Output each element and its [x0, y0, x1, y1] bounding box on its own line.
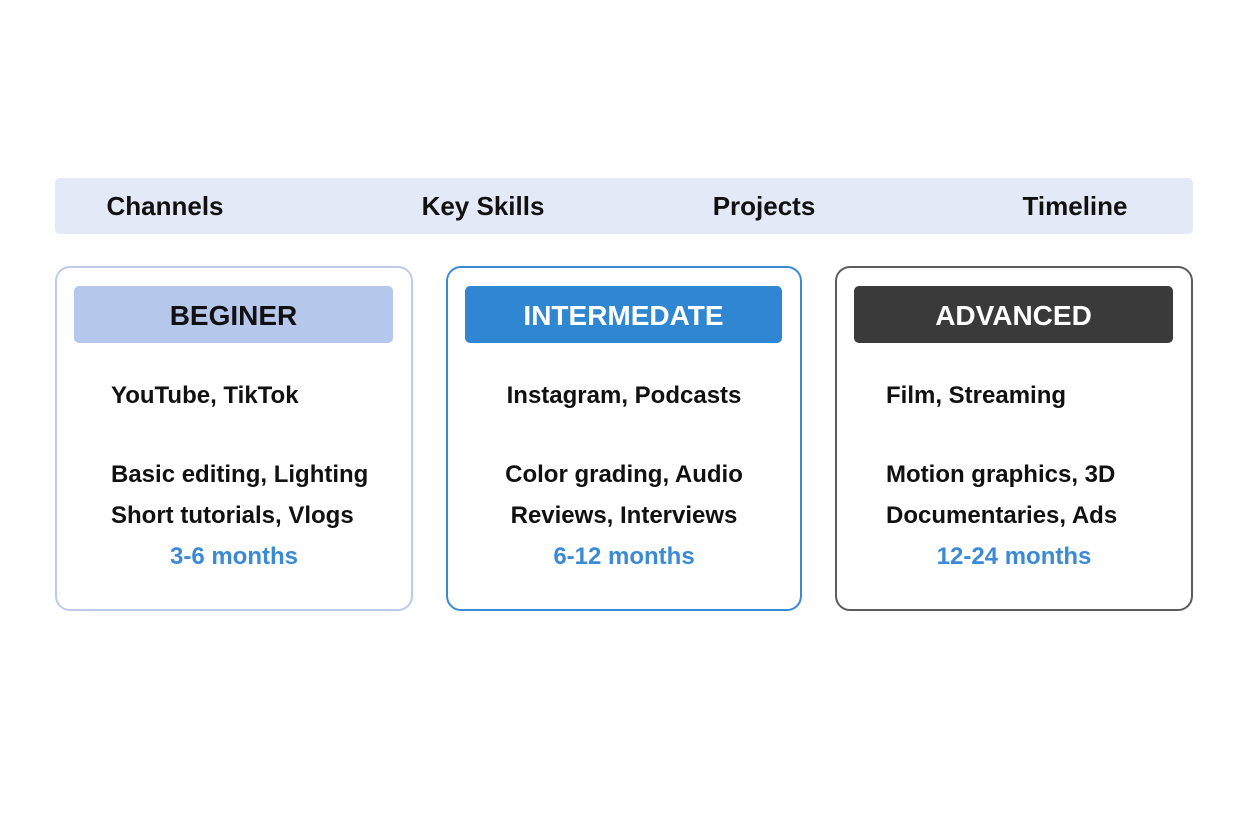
projects text: Documentaries, Ads: [886, 502, 1117, 529]
projects text: Reviews, Interviews: [511, 502, 737, 529]
panel: advanced: [835, 266, 1193, 611]
projects text: Short tutorials, Vlogs: [111, 502, 354, 529]
label: timeline: Timeline: [1022, 191, 1128, 221]
channels text: Film, Streaming: [886, 382, 1066, 409]
timeline text: 6-12 months: [553, 543, 695, 570]
label: key skills: Key Skills: [422, 191, 544, 221]
channels text: Instagram, Podcasts: [507, 382, 741, 409]
channels text: YouTube, TikTok: [111, 382, 299, 409]
skills text: Color grading, Audio: [505, 461, 743, 488]
timeline text: 12-24 months: [937, 543, 1091, 570]
pill: advanced: ADVANCED: [935, 300, 1092, 331]
panel: intermediate: [446, 266, 802, 611]
pill: beginer: BEGINER: [170, 300, 297, 331]
skills text: Basic editing, Lighting: [111, 461, 368, 488]
header bar: [55, 178, 1193, 234]
label: channels: Channels: [106, 191, 224, 221]
pill: intermediate: INTERMEDATE: [523, 300, 724, 331]
label: projects: Projects: [713, 191, 815, 221]
pill: advanced: [854, 286, 1173, 343]
timeline text: 3-6 months: [170, 543, 298, 570]
pill: beginer: [74, 286, 393, 343]
skills text: Motion graphics, 3D: [886, 461, 1115, 488]
pill: intermediate: [465, 286, 782, 343]
panel: beginner: [55, 266, 413, 611]
